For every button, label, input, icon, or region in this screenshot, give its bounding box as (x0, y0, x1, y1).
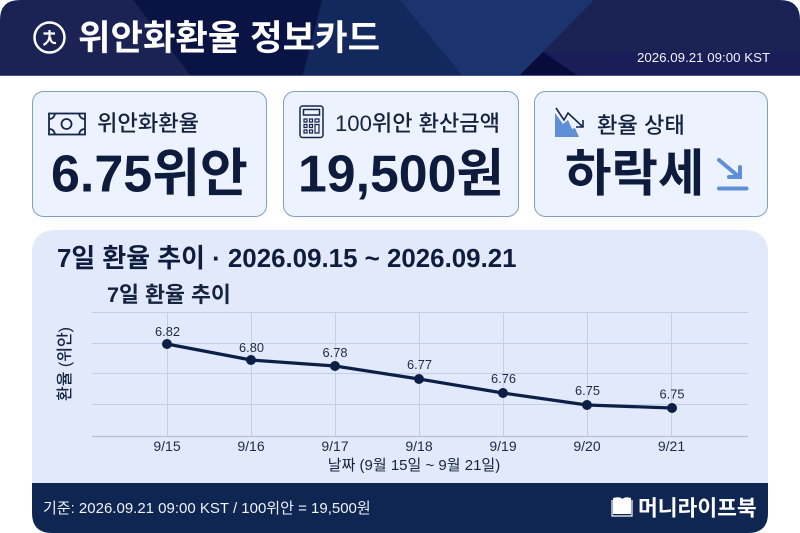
brand (612, 496, 757, 520)
data labels: 6.76 (491, 371, 516, 386)
panel: converted amount card (284, 92, 518, 216)
chart title: 7일 환율 추이 (107, 282, 231, 307)
header banner (0, 0, 800, 76)
icon: down arrow (719, 160, 746, 188)
brand name: 머니라이프북 (638, 496, 757, 520)
icon: book (612, 497, 632, 516)
icon: falling chart (555, 108, 583, 137)
icon: yuan coin (34, 22, 64, 52)
line chart (56, 282, 748, 474)
data labels: 6.78 (323, 345, 347, 360)
data labels: 6.75 (575, 383, 600, 398)
title: 위안화환율 정보카드 (78, 19, 380, 58)
card label: 환율 상태 (597, 113, 685, 138)
x axis labels: 9/19 (489, 438, 517, 454)
data labels: 6.82 (155, 324, 180, 339)
y axis title: 환율 (위안) (56, 327, 74, 401)
x axis labels: 9/15 (153, 438, 181, 454)
panel: 7-day trend (32, 230, 768, 483)
icon: calculator (300, 106, 323, 138)
data labels: 6.80 (239, 340, 264, 355)
x axis labels: 9/18 (405, 438, 433, 454)
trend heading: 7일 환율 추이 · 2026.09.15 ~ 2026.09.21 (57, 244, 517, 273)
timestamp: 2026.09.21 09:00 KST (637, 50, 770, 65)
data labels (155, 324, 684, 402)
x axis title: 날짜 (9월 15일 ~ 9월 21일) (328, 457, 500, 474)
footer bar (32, 483, 768, 533)
icon: banknote (49, 114, 85, 134)
x axis labels (153, 438, 685, 454)
x axis labels: 9/16 (237, 438, 265, 454)
card label: 위안화환율 (97, 111, 199, 136)
x axis labels: 9/20 (573, 438, 601, 454)
data labels: 6.75 (660, 386, 684, 402)
card value: 하락세 (565, 145, 704, 202)
card value: 6.75위안 (51, 146, 248, 204)
basis note: 기준: 2026.09.21 09:00 KST / 100위안 = 19,500원 (43, 500, 371, 517)
x axis labels: 9/21 (658, 438, 685, 454)
data line (162, 339, 677, 413)
x axis labels: 9/17 (321, 438, 349, 454)
card label: 100위안 환산금액 (335, 111, 500, 136)
card value: 19,500원 (298, 144, 504, 202)
panel: exchange rate card (32, 92, 266, 216)
panel: rate status card (534, 92, 768, 216)
data labels: 6.77 (407, 357, 432, 372)
